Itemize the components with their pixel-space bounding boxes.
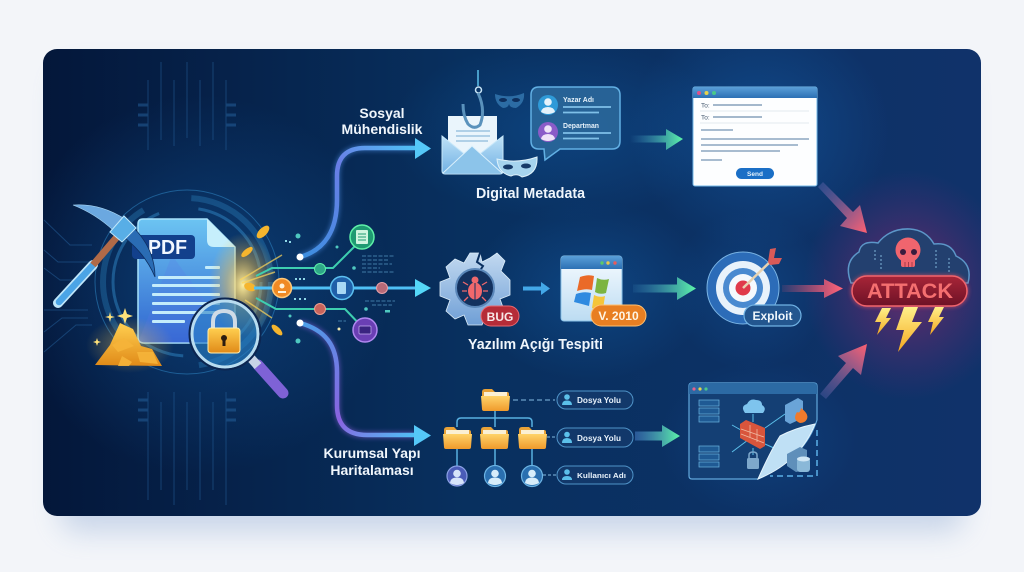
hero: PDF mining illustration	[58, 190, 284, 393]
icon: padlock	[747, 452, 759, 469]
icon: attack cloud	[848, 229, 969, 352]
text: Yazar Adı: Yazar Adı	[563, 95, 594, 104]
arrow: network to attack	[820, 344, 867, 399]
node: small green	[314, 264, 326, 274]
icon: target with arrow	[707, 248, 782, 324]
badge: Exploit	[744, 305, 801, 326]
button: Send: Send	[747, 171, 763, 178]
tag: Kullanıcı Adı	[557, 466, 633, 484]
icon: skull	[896, 238, 920, 267]
text: To fields	[701, 102, 710, 122]
data branch network	[254, 138, 431, 446]
label: Kurumsal Yapı Haritalaması: Kurumsal Yapı	[323, 445, 421, 461]
label: Sosyal Mühendislik: Mühendislik	[342, 121, 423, 137]
node: red lower	[314, 304, 326, 314]
label: Yazılım Açığı Tespiti: Yazılım Açığı Tespiti	[468, 337, 603, 353]
arrow: email to attack	[818, 182, 867, 233]
badge: ATTACK: ATTACK	[867, 280, 953, 303]
icon: database server	[787, 447, 810, 472]
arrow: exploit to attack	[782, 279, 843, 298]
badge: BUG: BUG	[487, 310, 513, 324]
text: Departman: Departman	[563, 121, 599, 130]
icon: cloud	[743, 400, 765, 413]
icon: right folder	[518, 427, 547, 449]
icon: left folder	[443, 427, 472, 449]
icon: fire server	[785, 398, 807, 424]
node: purple code	[353, 318, 377, 342]
icon: middle folder	[480, 427, 509, 449]
label: Kurumsal Yapı Haritalaması: Haritalaması	[330, 462, 414, 478]
tag: Dosya Yolu middle	[557, 428, 633, 447]
tag: Dosya Yolu middle: Dosya Yolu	[577, 434, 621, 443]
panel: phishing email window	[693, 87, 817, 186]
node: orange user	[272, 278, 292, 298]
icon: PDF document	[132, 219, 235, 343]
label: Digital Metadata: Digital Metadata	[476, 185, 586, 202]
left server racks	[699, 400, 719, 467]
icon: gear with bug	[440, 250, 510, 325]
icon: pickaxe	[58, 205, 155, 303]
arrow: structure to network map	[635, 425, 680, 447]
burst of gold and light	[209, 224, 284, 337]
node: red small	[376, 282, 388, 294]
icon: PDF document: PDF	[148, 237, 187, 259]
label: Sosyal Mühendislik: Sosyal	[359, 105, 405, 121]
arrow: software to exploit	[633, 277, 696, 300]
badge: BUG	[481, 306, 519, 326]
path: middle branch to bug detection	[254, 279, 431, 297]
icon: phishing envelope	[442, 70, 503, 174]
path: bottom branch to Kurumsal Yapı	[296, 320, 431, 446]
panel: metadata speech bubble	[531, 87, 620, 160]
org structure tree	[443, 389, 557, 486]
node: green document	[350, 225, 374, 249]
tag: Dosya Yolu top	[557, 391, 633, 409]
node: blue document	[330, 276, 354, 300]
data rings behind document	[95, 190, 279, 374]
main panel	[43, 49, 981, 516]
icon: firewall	[740, 420, 765, 449]
tag: Dosya Yolu top: Dosya Yolu	[577, 396, 621, 405]
arrow: bug to software	[523, 282, 550, 295]
text: To fields: To:	[701, 114, 710, 122]
page curl	[758, 424, 815, 479]
icon: gold pile	[86, 308, 174, 373]
icon: top mask	[495, 93, 524, 108]
icon: bottom mask	[497, 157, 537, 177]
icon: user middle	[484, 466, 506, 486]
green and purple sub-branches	[256, 241, 365, 330]
icon: window logo	[574, 275, 609, 310]
icon: user left	[447, 466, 467, 486]
icon: user right	[522, 466, 542, 486]
arrow: metadata to email	[630, 129, 683, 150]
panel: software window	[561, 256, 622, 321]
panel shadow	[60, 70, 964, 532]
tag: Kullanıcı Adı: Kullanıcı Adı	[577, 471, 626, 480]
panel: network map window	[689, 383, 817, 479]
icon: top folder	[481, 389, 510, 411]
path: top branch to Sosyal Mühendislik	[296, 138, 431, 260]
tiny data marks	[285, 234, 395, 344]
icon: lightning bolts	[875, 307, 944, 352]
badge: V. 2010: V. 2010	[598, 309, 639, 323]
avatar: author	[538, 95, 558, 115]
badge: Exploit: Exploit	[752, 309, 793, 323]
avatar: department	[538, 122, 558, 142]
icon: magnifier with padlock	[190, 298, 283, 393]
text: To fields: To:	[701, 102, 710, 110]
badge: V. 2010	[591, 305, 646, 326]
storm cloud	[848, 229, 969, 283]
